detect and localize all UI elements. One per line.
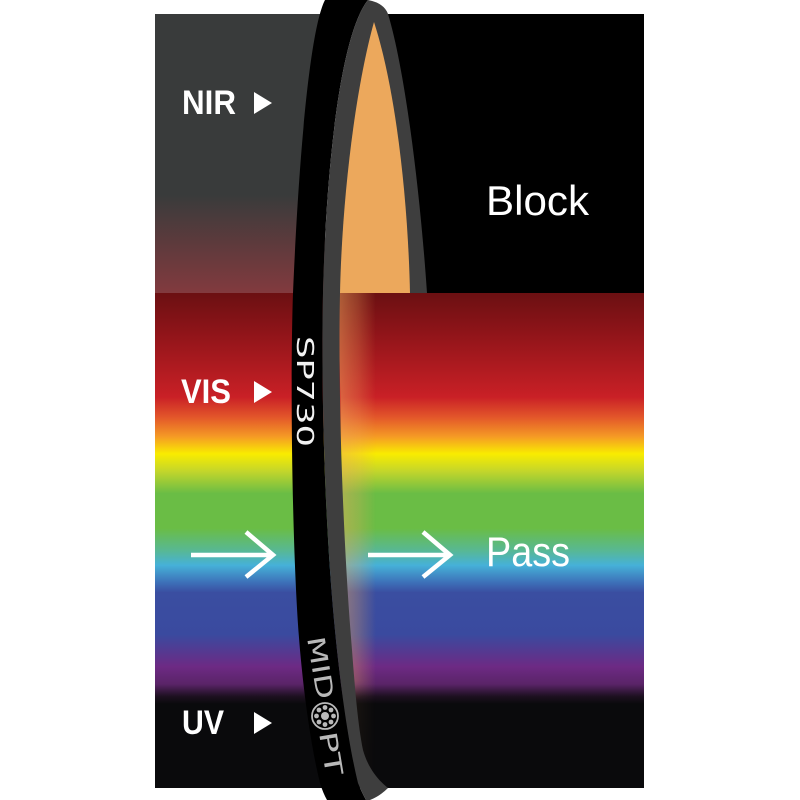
label: NIR: NIR [182, 84, 236, 122]
ring logo: MIDOPT [301, 634, 348, 778]
panel: transmitted spectrum [155, 293, 644, 788]
label: UV [182, 704, 272, 742]
arrow: transmitted light [368, 532, 450, 577]
label: Pass: Pass [486, 528, 570, 575]
logo text: PT: PT [313, 729, 348, 778]
label: VIS [181, 373, 272, 411]
ring: black outer band [292, 0, 368, 800]
label: UV: UV [182, 704, 224, 742]
lens tint over spectrum [340, 293, 373, 736]
panel: blocked region, right side [370, 14, 644, 293]
infographic: SP730 shortpass filter diagram [155, 0, 644, 800]
marker: VIS triangle [254, 381, 272, 403]
ring text: SP730: SP730 [291, 336, 317, 447]
label: Block: Block [486, 177, 590, 224]
label: NIR [182, 84, 272, 122]
label: VIS: VIS [181, 373, 231, 411]
arrow: incoming light [191, 532, 273, 577]
filter ring [291, 0, 427, 800]
panel: NIR band, left side [155, 14, 325, 293]
logo text: MID: MID [301, 634, 339, 701]
logo mark: ring of dots [312, 703, 338, 729]
marker: NIR triangle [254, 92, 272, 114]
ring: grey inner rim [322, 0, 427, 800]
lens: orange blocked-light area [340, 22, 410, 293]
marker: UV triangle [254, 712, 272, 734]
